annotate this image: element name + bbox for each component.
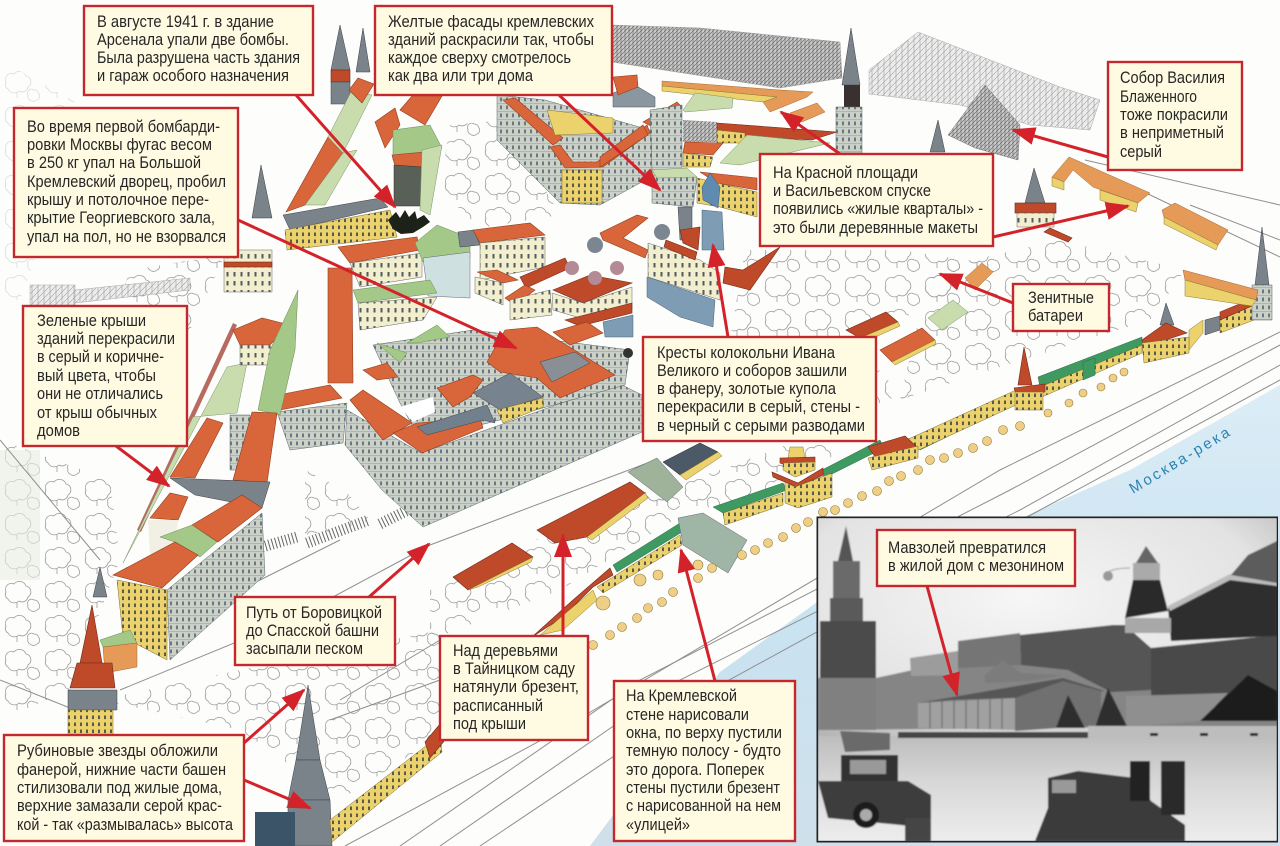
Arsenal and north corner [252, 25, 442, 250]
callout: green roofs: в серый и коричне- [37, 348, 164, 366]
callout: St Basil's [1108, 62, 1242, 170]
callout: green roofs: от крыш обычных [37, 404, 158, 422]
callout: ruby stars: фанерой, нижние части башен [17, 761, 226, 779]
Senate and central yellow buildings [497, 75, 837, 217]
callout: Ivan the Great crosses: Кресты колокольни Ивана [657, 344, 836, 362]
callout: Mausoleum: в жилой дом с мезонином [888, 557, 1064, 575]
callout: yellow facades: зданий раскрасили так, чтобы [388, 31, 594, 49]
callout: Taynitsky garden tarp [440, 636, 588, 740]
callout: first bombing [14, 108, 238, 257]
callout: Taynitsky garden tarp: Над деревьями [453, 642, 558, 660]
callout: decoy quarters: На Красной площади [773, 164, 918, 182]
callout: first bombing: упал на пол, но не взорвался [27, 228, 226, 246]
callout: Kremlin wall: «улицей» [626, 816, 690, 834]
callout: green roofs: Зеленые крыши [37, 312, 146, 330]
callout: Arsenal bombs: и гараж особого назначения [97, 67, 289, 85]
Ivan the Great bell tower and cathedrals [600, 207, 780, 327]
central palaces [328, 223, 633, 383]
callout: ruby stars: верхние замазали серой крас- [17, 797, 222, 815]
callout: Arsenal bombs: Арсенала упали две бомбы. [97, 31, 289, 49]
callout: St Basil's: Блаженного [1120, 88, 1197, 106]
callout: Kremlin wall: стене нарисовали [626, 706, 749, 724]
callout: anti-aircraft batteries: батареи [1028, 307, 1083, 325]
south wall [330, 298, 1254, 842]
photo: Red Square with disguised Mausoleum [818, 518, 1277, 842]
callout: green roofs: они не отличались [37, 385, 163, 403]
callout: Arsenal bombs: В августе 1941 г. в здание [97, 13, 274, 31]
callout: green roofs: зданий перекрасили [37, 330, 175, 348]
callout: sand road: до Спасской башни [246, 622, 379, 640]
callout: sand road: Путь от Боровицкой [246, 604, 382, 622]
callout: Arsenal bombs [84, 6, 313, 95]
arrow to Mausoleum [927, 586, 957, 695]
small yellow trees along the wall [588, 368, 1128, 650]
callout: green roofs: домов [37, 422, 80, 440]
callout: first bombing: Кремлевский дворец, пробил [27, 173, 226, 191]
callout: first bombing: Во время первой бомбарди- [27, 118, 220, 136]
Moscow river [590, 385, 1280, 846]
callout: Taynitsky garden tarp: в Тайницком саду [453, 660, 576, 678]
callout: decoy quarters: появились «жилые кварталы» - [773, 200, 983, 218]
callout: St Basil's: тоже покрасили [1120, 106, 1228, 124]
callout: yellow facades: Желтые фасады кремлевских [388, 13, 595, 31]
callout: green roofs: вый цвета, чтобы [37, 367, 156, 385]
callout: Kremlin wall: стены пустили брезент [626, 779, 780, 797]
Grand Kremlin Palace [277, 322, 642, 527]
callout: Taynitsky garden tarp: под крыши [453, 715, 526, 733]
callout: first bombing: ровки Москвы фугас весом [27, 136, 212, 154]
callout: Ivan the Great crosses [643, 337, 876, 441]
callout: Kremlin wall: темную полосу - будто [626, 742, 781, 760]
callout: first bombing: в 250 кг упал на Большой [27, 154, 201, 172]
callout: St Basil's: в неприметный [1120, 124, 1224, 142]
callout: Taynitsky garden tarp: натянули брезент, [453, 678, 579, 696]
callout: Ivan the Great crosses: перекрасили в серый, стены - [657, 398, 860, 416]
callout: Kremlin wall: с нарисованной на нем [626, 797, 781, 815]
callout: Mausoleum [877, 530, 1075, 586]
callout: Kremlin wall [614, 681, 795, 841]
callout: St Basil's: серый [1120, 143, 1162, 161]
callout: decoy quarters: это были деревянные макеты [773, 219, 978, 237]
callout: green roofs [23, 306, 187, 446]
callout: sand road [235, 597, 395, 665]
callout: yellow facades [375, 6, 612, 95]
Spasskaya tower and St Basil side [836, 28, 1072, 242]
camouflage tarpaulins and mock roofs [453, 263, 993, 590]
callout: Mausoleum: Мавзолей превратился [888, 539, 1046, 557]
callout: decoy quarters [760, 154, 993, 246]
Vodovzvodnaya tower [255, 685, 332, 846]
western buildings [93, 250, 298, 673]
callout: yellow facades: как два или три дома [388, 67, 534, 85]
callout: Kremlin wall: окна, по верху пустили [626, 724, 782, 742]
callout: ruby stars: стилизовали под жилые дома, [17, 779, 222, 797]
callout: anti-aircraft batteries: Зенитные [1028, 289, 1094, 307]
callout: Taynitsky garden tarp: расписанный [453, 697, 543, 715]
Borovitskaya tower [68, 605, 117, 736]
callout: first bombing: крышу и потолочное пере- [27, 191, 209, 209]
callout: St Basil's: Собор Василия [1120, 69, 1225, 87]
callout: Ivan the Great crosses: в фанеру, золотые купола [657, 380, 837, 398]
callout: Kremlin wall: это дорога. Поперек [626, 761, 765, 779]
wooden decoy quarters [1052, 157, 1228, 250]
arrows on the map [116, 95, 1128, 808]
callout: Arsenal bombs: Была разрушена часть здания [97, 49, 300, 67]
callout: Ivan the Great crosses: в черный с серыми разводами [657, 417, 865, 435]
top sketched buildings [30, 25, 1100, 305]
callout: first bombing: крытие Георгиевского зала, [27, 209, 215, 227]
callout: ruby stars [4, 735, 244, 841]
callout: anti-aircraft batteries [1013, 284, 1109, 331]
callout: sand road: засыпали песком [246, 640, 363, 658]
wall towers [772, 227, 1272, 508]
callout: decoy quarters: и Васильевском спуске [773, 182, 931, 200]
callout: ruby stars: Рубиновые звезды обложили [17, 742, 218, 760]
callout: Ivan the Great crosses: Великого и соборов зашили [657, 362, 847, 380]
callout: Kremlin wall: На Кремлевской [626, 687, 737, 705]
callout: yellow facades: каждое сверху смотрелось [388, 49, 571, 67]
callout: ruby stars: кой - так «размывалась» высота [17, 816, 234, 834]
river label: Москва-река [1126, 423, 1235, 497]
